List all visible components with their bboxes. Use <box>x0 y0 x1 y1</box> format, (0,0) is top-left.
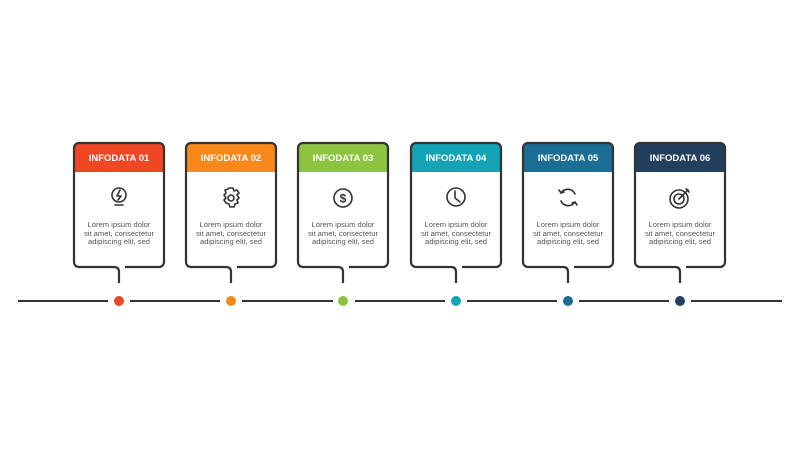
step 1 card: INFODATA 01 <box>89 153 150 164</box>
step 1 card <box>74 143 164 306</box>
step 4 card <box>411 143 501 306</box>
step 6 card <box>635 143 725 306</box>
step 5 card <box>523 143 613 306</box>
icon: refresh <box>559 189 577 206</box>
icon: clock <box>447 188 465 206</box>
step 2 card: sit amet, consectetur <box>196 229 267 238</box>
step 1 card: sit amet, consectetur <box>84 229 155 238</box>
step 4 card: sit amet, consectetur <box>421 229 492 238</box>
step 1 card: adipiscing elit, sed <box>88 237 150 246</box>
step 2 card: adipiscing elit, sed <box>200 237 262 246</box>
step 6 card: sit amet, consectetur <box>645 229 716 238</box>
icon: target <box>670 189 689 208</box>
step 3 card: adipiscing elit, sed <box>312 237 374 246</box>
step 6 card: adipiscing elit, sed <box>649 237 711 246</box>
step 3 card: sit amet, consectetur <box>308 229 379 238</box>
step 3 card: INFODATA 03 <box>313 153 373 164</box>
icon: dollar: $ <box>340 192 347 206</box>
timeline line <box>18 300 782 302</box>
step 1 card: Lorem ipsum dolor <box>88 220 151 229</box>
step 2 card: Lorem ipsum dolor <box>200 220 263 229</box>
step 3 card <box>298 143 388 306</box>
icon: dollar <box>334 189 352 207</box>
step 4 card: Lorem ipsum dolor <box>425 220 488 229</box>
step 6 card: INFODATA 06 <box>650 153 710 164</box>
icon: lightbulb <box>112 188 126 205</box>
step 6 card: Lorem ipsum dolor <box>649 220 712 229</box>
step 4 card: adipiscing elit, sed <box>425 237 487 246</box>
step 2 card <box>186 143 276 306</box>
step 5 card: INFODATA 05 <box>538 153 599 164</box>
step 5 card: adipiscing elit, sed <box>537 237 599 246</box>
step 5 card: Lorem ipsum dolor <box>537 220 600 229</box>
step 2 card: INFODATA 02 <box>201 153 261 164</box>
step 5 card: sit amet, consectetur <box>533 229 604 238</box>
step 4 card: INFODATA 04 <box>426 153 487 164</box>
step 3 card: Lorem ipsum dolor <box>312 220 375 229</box>
icon: gear <box>224 188 239 207</box>
